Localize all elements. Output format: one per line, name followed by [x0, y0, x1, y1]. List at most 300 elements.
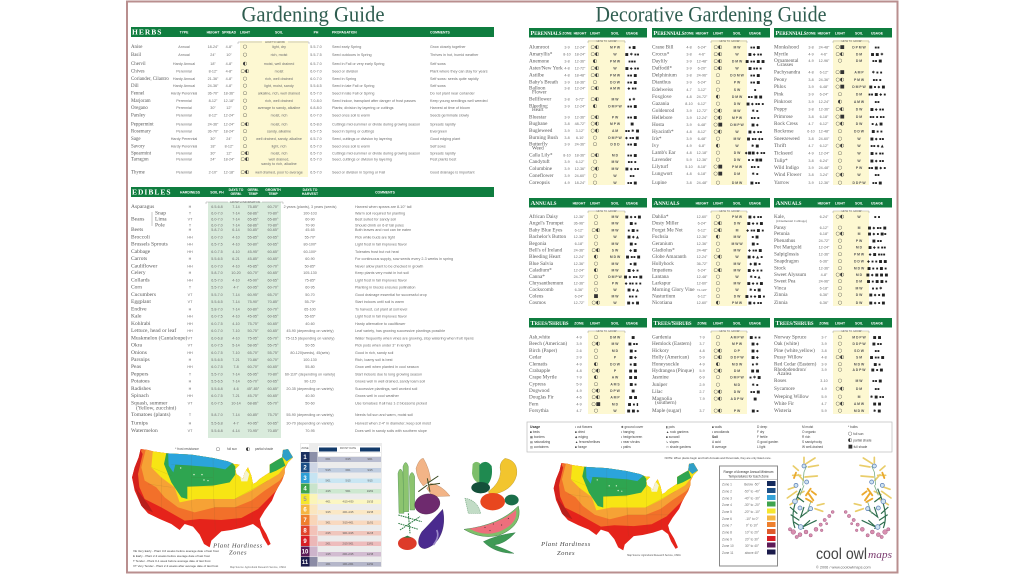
- edibles rows: 70-95°: [248, 429, 259, 433]
- trees rows 1: ▪ ■: [629, 362, 637, 366]
- planting dates: [325, 457, 374, 566]
- perennials rows 2: 3-9: [686, 80, 692, 84]
- trees rows 2: M D: [734, 383, 741, 387]
- trees rows 2: ○◐: [714, 368, 722, 374]
- perennials rows 2: M P W: [732, 116, 743, 120]
- annuals rows 3: M W: [856, 286, 863, 290]
- edibles rows: 60-70°: [268, 358, 279, 362]
- perennials rows 1: P M W: [610, 60, 621, 64]
- edibles rows: 70-86°: [248, 358, 259, 362]
- legend box: F fertile: [757, 435, 768, 439]
- edibles rows: VT: [188, 344, 193, 348]
- herbs rows: Keep young seedlings well weeded: [430, 99, 488, 103]
- edibles rows: HH: [187, 236, 193, 240]
- zone numbers: 7: [303, 518, 307, 524]
- annuals rows 1: P W: [612, 282, 619, 286]
- annuals rows 3: ■ ▪ ■ ■ ▪: [867, 278, 888, 284]
- edibles rows: 2 years (plants), 3 years (seeds): [284, 205, 336, 209]
- perennials rows 2: ◐: [716, 94, 720, 100]
- trees rows 2: 6-9: [699, 376, 705, 380]
- edibles rows: 70-85°: [268, 429, 279, 433]
- herbs rows: 10": [226, 53, 232, 57]
- perennials rows 3: D M: [856, 52, 862, 56]
- perennials rows 2: ○■: [713, 171, 723, 177]
- herbs rows: Good edging plant: [430, 137, 460, 141]
- edibles rows: Warm soil required for planting: [355, 212, 405, 216]
- annuals rows 1: M D W: [610, 255, 621, 259]
- perennials rows 3: Primrose: [774, 114, 793, 120]
- trees rows 2: 4-8: [699, 349, 705, 353]
- herbs rows: rich, well drained: [265, 99, 293, 103]
- perennials rows 1: 4-8: [564, 74, 570, 78]
- trees rows 3: ✱ ■ ▪▪: [870, 394, 885, 399]
- perennials header: [774, 28, 892, 38]
- perennials rows 2: 24-96": [697, 74, 708, 78]
- edibles rows: 50-60: [305, 402, 315, 406]
- illustration: right flower bouquet: [844, 457, 891, 539]
- perennials rows 2: Daffodil*: [652, 64, 672, 72]
- map: plant hardiness zones, right: [550, 459, 702, 556]
- perennials rows 3: Peony: [774, 77, 787, 83]
- herbs rows: ◐: [243, 61, 247, 67]
- perennials rows 2: Hellebore: [652, 115, 673, 121]
- annuals rows 1: M W: [612, 268, 619, 272]
- annuals rows 2: ○◐: [714, 268, 722, 274]
- annuals header: LIGHT: [713, 202, 724, 206]
- annuals rows 1: ■ ◆ ▪▪ ■: [624, 274, 643, 279]
- trees rows 2: 5-9: [699, 356, 705, 360]
- trees rows 1: ■ ▪: [629, 348, 637, 353]
- perennials rows 3: 3-8: [808, 173, 814, 177]
- edibles rows: Brussels Sprouts: [131, 242, 168, 248]
- edibles rows: 4-10: [232, 278, 240, 282]
- trees rows 1: Dogwood: [529, 388, 550, 394]
- perennials rows 3: ○■: [835, 84, 845, 90]
- trees rows 1: M W: [612, 342, 619, 346]
- map caption: Plant Hardiness Zones right: Zones: [557, 550, 575, 557]
- perennials rows 2: ▪▪ ■ ■: [748, 94, 763, 99]
- annuals header: Annuals: [654, 200, 680, 207]
- perennials rows 1: Flower: [532, 90, 547, 96]
- perennials rows 2: W: [735, 66, 739, 70]
- perennials rows 1: M W: [612, 98, 619, 102]
- edibles rows: 60-70°: [268, 205, 279, 209]
- edibles rows: Keep plants very moist in hot soil: [355, 271, 409, 275]
- herbs rows: 4-8": [226, 45, 233, 49]
- trees header: Trees/Shrubs: [776, 320, 814, 327]
- trees rows 2: ■ ◆: [751, 348, 759, 353]
- perennials rows 3: Yarrow: [774, 180, 790, 186]
- annuals rows 2: ■ ◆ ▪▪: [748, 300, 762, 305]
- herbs rows: Hardy Perennial: [171, 92, 197, 96]
- map key: sun icons: ◐: [246, 446, 250, 452]
- table heading: Range of Average Annual Minimum: [724, 470, 774, 474]
- edibles rows: Use tomatoes if all has 1-2 blossoms picked: [355, 402, 427, 406]
- edibles rows: VT: [188, 293, 193, 297]
- edibles rows: 60-90: [305, 218, 315, 222]
- annuals rows 2: ○: [716, 274, 720, 280]
- herbs rows: Perennial: [176, 130, 192, 134]
- edibles rows: Good drainage essential for successful crop: [355, 293, 427, 297]
- planting legend: VT Very Tender - Plant 2-3 weeks after average date of last frost: [133, 564, 218, 568]
- perennials rows 1: ▪▪ ■: [627, 142, 637, 146]
- perennials rows 1: P M W: [610, 74, 621, 78]
- perennials rows 2: W: [735, 52, 739, 56]
- herbs rows: Perennial: [176, 122, 192, 126]
- perennials rows 3: 4-9: [808, 59, 814, 63]
- annuals rows 1: Baby Blue Eyes: [529, 228, 562, 234]
- perennials rows 2: 4-6": [699, 52, 706, 56]
- edibles rows: 7-14: [232, 413, 240, 417]
- perennials rows 3: W: [857, 152, 861, 156]
- annuals rows 3: Vinca: [774, 286, 787, 292]
- edibles rows: Spinach: [131, 393, 149, 399]
- edibles rows: Grows well in well drained, sandy loam soil: [355, 380, 425, 384]
- planting dates: 4/15: [325, 489, 331, 493]
- perennials header: LIGHT: [835, 32, 846, 36]
- edibles rows: 5.5-6.5: [211, 257, 223, 261]
- edibles rows: 30-70 (depending on variety): [286, 422, 334, 426]
- perennials header: HEIGHT: [818, 32, 831, 36]
- edibles rows: 6.0-7.0: [211, 236, 223, 240]
- perennials rows 1: ○: [593, 135, 597, 141]
- perennials rows 1: 6-12": [576, 160, 585, 164]
- trees header: SOIL: [733, 322, 741, 326]
- trees rows 2: ○◐: [714, 389, 722, 395]
- perennials rows 2: 3-9: [686, 137, 692, 141]
- herbs rows: ○: [243, 83, 247, 89]
- edibles rows: 55-85°: [248, 236, 259, 240]
- edibles rows: HH: [187, 351, 193, 355]
- herbs rows: Perennial: [176, 152, 192, 156]
- perennials rows 1: A M W: [610, 86, 621, 90]
- trees rows 1: ○: [594, 334, 598, 340]
- edibles rows: Collards: [131, 278, 150, 284]
- edibles rows: Squash, summer: [131, 400, 168, 406]
- trees rows 1: W: [613, 409, 617, 413]
- trees rows 2: Hydrangea (Pinque): [652, 367, 694, 374]
- edibles rows: Beets: [131, 227, 143, 233]
- edibles rows: 5.5-6.5: [211, 380, 223, 384]
- herbs rows: Sage: [131, 137, 141, 142]
- edibles rows: Lettuce, head or leaf: [131, 327, 176, 334]
- edibles rows: H: [189, 205, 192, 209]
- perennials rows 3: W: [857, 159, 861, 163]
- herbs rows: 8-12": [209, 99, 218, 103]
- herbs header bar: COMMENTS: [430, 30, 451, 34]
- perennials rows 1: ○◐: [591, 121, 599, 127]
- growth information bracket: [206, 200, 283, 204]
- herbs rows: 8-12": [209, 114, 218, 118]
- perennials rows 2: M W: [734, 137, 741, 141]
- herbs rows: ○◐: [241, 68, 249, 74]
- perennials rows 3: ○: [838, 58, 842, 64]
- edibles rows: Eggplant: [131, 299, 151, 305]
- edibles rows: Best suited for sandy soil: [355, 218, 396, 222]
- trees rows 3: ○◐: [836, 386, 844, 392]
- edibles rows: Pick pods when under 3" in length: [355, 344, 411, 348]
- perennials rows 3: 24-36": [819, 78, 830, 82]
- edibles rows: Kohlrabi: [131, 321, 151, 327]
- planting dates: 1/01-2/01: [343, 562, 354, 566]
- perennials rows 3: ○■: [835, 44, 845, 50]
- herbs rows: Marjoram: [131, 99, 151, 104]
- edibles rows: 5.5-7.0: [211, 286, 223, 290]
- edibles rows: Radishes: [131, 386, 151, 392]
- annuals rows 1: ○: [594, 274, 598, 280]
- perennials rows 2: ○◐: [714, 58, 722, 64]
- edibles rows: 4-10: [232, 336, 240, 340]
- edibles rows: 60-95°: [248, 293, 259, 297]
- trees rows 1: ■ ▪: [629, 382, 637, 386]
- trees rows 1: ■ ▪▪: [628, 341, 638, 346]
- perennials header: ZONE: [806, 32, 816, 36]
- perennials rows 2: 6-48": [698, 123, 707, 127]
- perennials header: USAGE: [749, 32, 762, 36]
- perennials rows 1: Coneflower: [529, 172, 554, 179]
- perennials rows 3: 3-24": [820, 173, 829, 177]
- perennials rows 1: M W: [612, 160, 619, 164]
- herbs rows: well drained,: [269, 158, 289, 162]
- perennials header: Perennials: [530, 30, 562, 37]
- perennials rows 2: 3-9: [686, 123, 692, 127]
- how to grow bracket: HOW TO GROW: [597, 329, 617, 333]
- planting dates: 2/01: [325, 542, 331, 546]
- perennials rows 3: ◐: [838, 99, 842, 105]
- planting dates: 9/15: [367, 468, 373, 472]
- perennials rows 1: Bellflower: [529, 96, 551, 102]
- herbs rows: 18-24": [224, 158, 235, 162]
- trees header: Trees/Shrubs: [530, 320, 569, 327]
- trees rows 1: [529, 334, 639, 414]
- trees header: USAGE: [871, 322, 884, 326]
- annuals rows 1: S W: [612, 248, 619, 252]
- zone rows: -30° to -20°: [744, 503, 761, 507]
- herbs rows: Thyme: [131, 170, 145, 176]
- perennials rows 1: Weed: [532, 146, 544, 152]
- annuals rows 2: ■ ▪: [751, 241, 759, 246]
- perennials rows 2: 3-9: [686, 116, 692, 120]
- legend box: ▪ hanging: [621, 430, 635, 434]
- herbs rows: Seed or division: [332, 70, 358, 74]
- edibles rows: Light frost in fall improves flavor: [355, 242, 408, 246]
- herbs rows: ○◐: [241, 150, 249, 156]
- annuals rows 1: 6-12": [575, 228, 584, 232]
- perennials rows 1: 3-9: [564, 142, 570, 146]
- annuals rows 2: M W: [734, 248, 741, 252]
- perennials rows 2: D M W: [732, 181, 743, 185]
- edibles header bar: DAYS TO: [303, 188, 318, 192]
- herbs rows: 6.5-7.0: [310, 152, 322, 156]
- herbs rows: moist, rich: [271, 122, 287, 126]
- trees rows 1: 4-9: [576, 402, 582, 406]
- perennials rows 3: ○◐: [836, 106, 844, 112]
- perennials rows 2: ○: [716, 87, 720, 93]
- perennials rows 1: D M P W: [608, 104, 623, 108]
- herbs header bar: PROPAGATION: [332, 30, 357, 34]
- perennials rows 2: ○◐: [714, 44, 722, 50]
- edibles rows: 6.0-6.8: [211, 336, 223, 340]
- perennials rows 2: ■ ▪▪ ◆▪: [747, 136, 764, 141]
- edibles rows: 50-80°: [248, 242, 259, 246]
- perennials rows 2: 12-36": [697, 158, 708, 162]
- perennials rows 2: 6-24": [698, 46, 707, 50]
- perennials rows 1: D D D: [610, 142, 620, 146]
- trees rows 2: 3-7: [699, 409, 705, 413]
- table: temperature range by zone: [720, 466, 778, 566]
- perennials header: LIGHT: [713, 32, 724, 36]
- perennials rows 3: 3-8: [808, 115, 814, 119]
- perennials rows 2: [652, 44, 766, 186]
- edibles rows: HH: [187, 394, 193, 398]
- perennials rows 1: 18-48": [575, 74, 586, 78]
- perennials rows 3: D D W: [854, 130, 865, 134]
- legend box: ○ full sun: [848, 431, 864, 437]
- herbs header bar: LIGHT: [240, 30, 251, 34]
- annuals rows 1: 6-24": [575, 294, 584, 298]
- edibles rows: Cabbage: [131, 249, 151, 255]
- annuals header: USAGE: [626, 202, 639, 206]
- trees rows 2: Juniper: [652, 382, 668, 388]
- perennials rows 1: 3-9: [564, 80, 570, 84]
- annuals rows 2: 6-24": [698, 268, 707, 272]
- annuals rows 1: Angel's Trumpet: [529, 220, 564, 226]
- edibles rows: Snap: [155, 210, 166, 216]
- perennials rows 1: 48-72": [575, 122, 586, 126]
- trees rows 1: ○■: [591, 402, 601, 408]
- annuals rows 2: ■ ◆ ▪ ■: [747, 280, 764, 286]
- perennials rows 2: 12-24": [697, 116, 708, 120]
- perennials rows 2: Crane Bill: [652, 44, 674, 50]
- map key: sun icons: partial shade: [255, 447, 273, 451]
- trees rows 3: ○: [838, 394, 842, 400]
- trees rows 1: Clematis: [529, 362, 547, 368]
- edibles rows: 55-75°: [268, 351, 279, 355]
- edibles rows: Parsnips: [131, 357, 150, 363]
- perennials rows 3: ▪▪ ■: [872, 180, 882, 185]
- edibles rows: (Yellow, zucchini): [136, 404, 176, 412]
- perennials rows 3: Tulip*: [774, 158, 788, 164]
- perennials rows 2: Delphinium: [652, 72, 677, 78]
- trees rows 1: Birch (Paper): [529, 347, 557, 354]
- perennials rows 1: 12-72": [575, 66, 586, 70]
- edibles rows: 40-60: [305, 322, 315, 326]
- annuals rows 2: [652, 214, 765, 306]
- edibles rows: 5.8-7.0: [211, 271, 223, 275]
- edibles rows: HH: [187, 314, 193, 318]
- annuals rows 2: 12-36": [697, 235, 708, 239]
- zone numbers: 5: [303, 497, 307, 503]
- edibles rows: 10-14: [231, 402, 241, 406]
- perennials rows 1: 8-10: [563, 154, 571, 158]
- herbs rows: moist, rich: [271, 114, 287, 118]
- edibles rows: 100-103: [303, 212, 317, 216]
- herbs rows: 6.5-7.0: [310, 137, 322, 141]
- perennials rows 3: ■ ▪ ▪: [871, 128, 883, 134]
- edibles rows: T: [189, 372, 192, 376]
- edibles rows: 60-65°: [268, 228, 279, 232]
- perennials rows 3: Pachysandra: [774, 70, 801, 76]
- trees rows 3: S M: [856, 356, 862, 360]
- herbs rows: well drained, poor to average: [255, 170, 303, 174]
- perennials rows 3: 12-36": [819, 181, 830, 185]
- perennials rows 1: Bluestar: [529, 114, 547, 120]
- perennials rows 1: Butterfly: [529, 140, 548, 148]
- trees rows 3: Oak (white): [774, 340, 799, 347]
- edibles rows: Does well in sandy soils with southern slope: [355, 429, 427, 433]
- trees rows 1: Fern: [529, 402, 539, 408]
- perennials rows 1: 3-8: [564, 86, 570, 90]
- trees rows 2: D P: [734, 349, 741, 353]
- edibles header bar: GROWTH: [265, 188, 281, 192]
- zone numbers: 11: [302, 560, 309, 566]
- perennials rows 2: ○■: [713, 164, 723, 170]
- trees rows 3: M W: [856, 379, 863, 383]
- annuals rows 3: 12-36": [819, 266, 830, 270]
- annuals rows 1: ◆ ■: [629, 248, 637, 252]
- trees rows 1: ■ ◆: [629, 354, 637, 360]
- trees rows 3: M: [858, 395, 861, 399]
- edibles rows: 7-14: [232, 224, 240, 228]
- herbs rows: Fennel: [131, 92, 145, 96]
- herbs rows: ○: [243, 98, 247, 104]
- perennials rows 2: 24-48": [697, 181, 708, 185]
- herbs rows: ○: [243, 44, 247, 50]
- perennials rows 1: Coreopsis: [529, 180, 550, 186]
- herbs rows: 30": [210, 137, 216, 141]
- panel: herbs table: [131, 27, 494, 177]
- perennials rows 3: 12-48": [819, 130, 830, 134]
- perennials rows 2: ○: [716, 80, 720, 86]
- planting dates: 5/15: [345, 478, 351, 482]
- map: plant hardiness zones, left: [128, 444, 298, 554]
- edibles rows: 55-65*: [305, 314, 316, 318]
- zone rows: Zone 7: [722, 524, 732, 528]
- edibles rows: 45-65: [305, 228, 315, 232]
- trees rows 2: P W: [734, 409, 741, 413]
- edibles rows: Start indoors until soil is warm: [355, 300, 404, 304]
- herbs rows: 18-24": [224, 130, 235, 134]
- annuals rows 1: Begonia: [529, 241, 547, 247]
- trees rows 1: ■ ■ ◆: [627, 408, 639, 413]
- perennials rows 1: 24-36": [575, 142, 586, 146]
- annuals rows 2: ○: [716, 287, 720, 293]
- perennials rows 3: ▪ ▲ ■: [871, 121, 883, 126]
- herbs rows: 18-24": [208, 45, 219, 49]
- perennials rows 1: ▪ ■: [628, 44, 636, 50]
- annuals rows 2: 12-60": [697, 215, 708, 219]
- edibles rows: 65-95°: [248, 372, 259, 376]
- edibles rows: Both leaves and root can be eaten: [355, 228, 411, 232]
- legend box: W well-drained: [802, 445, 823, 449]
- herbs rows: 6.5-8.0: [310, 122, 322, 126]
- perennials rows 3: Wild Indigo: [774, 165, 799, 171]
- how to grow bracket: HOW TO GROW: [597, 39, 617, 43]
- edibles rows: 60-70°: [268, 286, 279, 290]
- edibles rows: 6.0-7.5: [211, 402, 223, 406]
- perennials rows 1: Bugleweed: [529, 128, 553, 134]
- annuals rows 1: [529, 213, 643, 306]
- edibles rows: Celery: [131, 270, 146, 276]
- annuals rows 3: ■ ◆ ▪ ■▪: [868, 231, 887, 236]
- perennials rows 2: ✱ ■: [751, 143, 759, 148]
- annuals rows 1: Cockscomb: [529, 287, 554, 293]
- map key: sun icons: * frost resistance: [175, 447, 199, 451]
- trees rows 1: ○: [594, 382, 598, 388]
- annuals rows 3: ▪ ▪ ✱: [872, 286, 882, 290]
- herbs rows: Annual: [178, 53, 190, 57]
- annuals rows 2: ■ ◆ ▪▪: [748, 214, 762, 219]
